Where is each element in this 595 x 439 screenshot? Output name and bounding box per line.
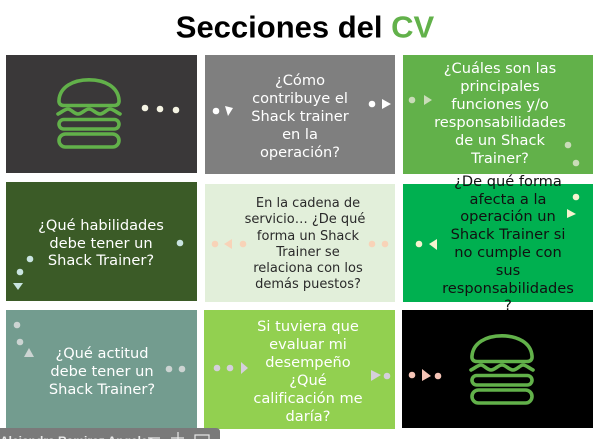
text: functions question: principales [460, 78, 540, 95]
text: contribution question: contribuye el [252, 90, 348, 107]
text: consequences question: operación un [460, 208, 556, 225]
text: contribution question [251, 72, 349, 161]
text: service chain question: Trainer se [275, 245, 340, 260]
text: functions question: funciones y/o [451, 96, 549, 113]
panel: skills question [6, 182, 197, 301]
icon: burger [471, 336, 533, 403]
text: rating question: Si tuviera que [257, 318, 359, 335]
text: skills question: ¿Qué habilidades [38, 217, 164, 234]
text: service chain question [245, 196, 365, 292]
text: skills question: debe tener un [49, 235, 153, 252]
arrow: markers [14, 322, 185, 372]
panel: burger logo dark [6, 55, 197, 173]
text: service chain question: servicio… ¿De qué [245, 212, 365, 227]
panel: consequences question [403, 173, 593, 314]
panel: functions question [403, 55, 593, 174]
dots [142, 105, 179, 113]
text: rating question [253, 318, 363, 425]
text: consequences question: sus [496, 262, 520, 279]
text: functions question [434, 60, 566, 167]
text: service chain question: forma un Shack [257, 229, 360, 244]
text: contribution question: operación? [260, 144, 340, 161]
text: attitude question: ¿Qué actitud [55, 345, 149, 362]
text: consequences question: no cumple con [454, 244, 562, 261]
presenter toolbar [0, 428, 220, 439]
text: functions question: Trainer? [470, 150, 529, 167]
text: attitude question: Shack Trainer? [49, 381, 155, 398]
text: contribution question: en la [282, 126, 318, 143]
text: functions question: ¿Cuáles son las [444, 60, 556, 77]
text: consequences question: afecta a la [470, 191, 546, 208]
text: rating question: daría? [286, 408, 330, 425]
panel: burger logo black [402, 310, 593, 428]
text: service chain question: demás puestos? [255, 277, 361, 292]
panel: rating question [204, 310, 395, 429]
arrow: markers [416, 194, 579, 250]
text: consequences question: ¿De qué forma [454, 173, 562, 190]
arrow: right markers [369, 99, 391, 109]
icon: burger [58, 80, 120, 147]
panel: contribution question [205, 55, 395, 174]
text: functions question: responsabilidades [434, 114, 566, 131]
title: Secciones del CV [176, 10, 435, 44]
text: rating question: ¿Qué [289, 372, 327, 389]
text: rating question: calificación me [253, 390, 363, 407]
text: consequences question [442, 173, 574, 314]
text: skills question [38, 217, 164, 269]
panel: service chain question [205, 184, 395, 302]
toolbar icons [148, 432, 209, 439]
text: attitude question: debe tener un [50, 363, 154, 380]
text: rating question: desempeño [265, 354, 351, 371]
text: consequences question: Shack Trainer si [451, 226, 565, 243]
arrow: markers [409, 95, 579, 166]
text: service chain question: relaciona con los [253, 261, 363, 276]
arrow: markers [13, 240, 183, 290]
arrow: markers [212, 239, 388, 249]
text: consequences question: ? [504, 297, 512, 314]
text: consequences question: responsabilidades [442, 280, 574, 297]
arrow: left markers [213, 106, 233, 116]
text: functions question: de un Shack [455, 132, 546, 149]
text: service chain question: En la cadena de [256, 196, 360, 211]
text: contribution question: Shack trainer [251, 108, 349, 125]
text: rating question: evaluar mi [269, 336, 347, 353]
arrow: markers [409, 369, 441, 381]
text: contribution question: ¿Cómo [275, 72, 325, 89]
panel: attitude question [6, 310, 197, 428]
arrow: markers [214, 362, 390, 381]
text: skills question: Shack Trainer? [48, 252, 154, 269]
text: attitude question [49, 345, 155, 398]
